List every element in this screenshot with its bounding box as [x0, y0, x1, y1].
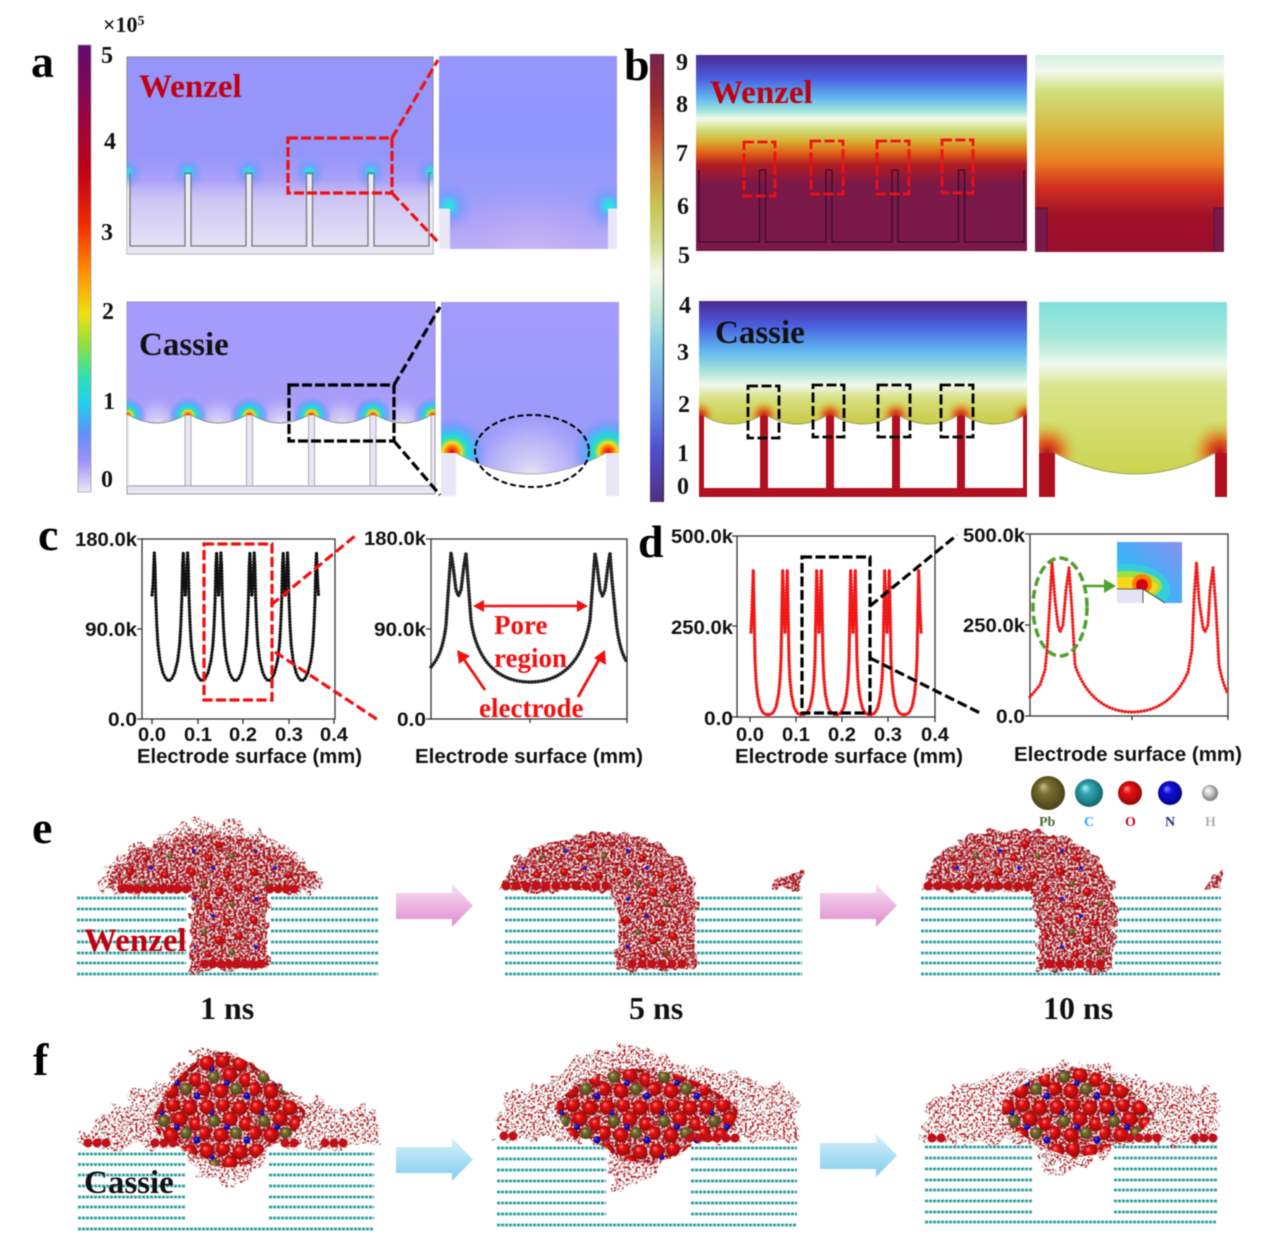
chart d left: 0.3 [874, 725, 902, 746]
chart c left: 0.0 [138, 725, 166, 746]
red zoom lines [271, 536, 378, 720]
colorbar b: 3 [677, 340, 689, 366]
chart c left: 0.1 [184, 725, 212, 746]
chart d left: 0.0 [736, 725, 764, 746]
Wenzel enlarged concentration [1035, 55, 1224, 252]
chart c left: 90.0k [85, 620, 137, 641]
snapshot 1 ns [77, 822, 378, 974]
black dashed boxes [748, 385, 973, 438]
N atom: N [1165, 815, 1175, 830]
Cassie heading: Cassie [84, 1165, 174, 1201]
panel c: electric field line charts [75, 529, 643, 768]
blue arrow 2 [820, 1134, 897, 1177]
colorbar a: 2 [102, 299, 114, 325]
C atom [1075, 779, 1103, 830]
panel label f: f [33, 1034, 49, 1085]
chart d right: Electrode surface (mm) [1014, 744, 1242, 766]
red zoom lines [392, 60, 438, 242]
red dashed selection box [204, 544, 272, 700]
Wenzel heading: Wenzel [710, 75, 813, 111]
O atom: O [1125, 815, 1136, 830]
pore region annotation: Pore [494, 610, 547, 640]
chart d right: 0.0 [996, 707, 1025, 728]
chart d left: 500.0k [671, 527, 733, 548]
H atom: H [1205, 815, 1216, 830]
atom legend [1031, 776, 1218, 830]
chart d left [671, 527, 963, 768]
chart d left: 0.2 [828, 725, 856, 746]
colorbar a: 3 [101, 220, 113, 246]
blue arrow 1 [396, 1138, 473, 1181]
chart c left: 0.2 [229, 725, 257, 746]
panel label d: d [638, 516, 664, 567]
chart c right: 180.0k [364, 529, 426, 550]
panel d: electric field line charts [671, 526, 1242, 768]
colorbar b: 5 [678, 243, 690, 269]
N atom [1158, 781, 1182, 830]
snapshot 10 ns [921, 830, 1222, 974]
panel f: Cassie molecular dynamics [78, 1045, 1218, 1229]
chart c left: 180.0k [75, 530, 137, 551]
time label 1 ns: 1 ns [200, 990, 254, 1026]
colorbar b: 1 [677, 441, 689, 467]
red dashed selection box [288, 138, 392, 193]
black zoom lines [870, 535, 982, 714]
Pb atom [1031, 776, 1065, 830]
black zoom lines [394, 307, 440, 495]
Pb atom: Pb [1039, 815, 1056, 830]
colorbar b: 8 [676, 92, 688, 118]
colorbar a [78, 12, 145, 493]
chart d right: 250.0k [963, 616, 1025, 637]
chart c right: 90.0k [374, 620, 426, 641]
red dashed boxes [744, 140, 973, 196]
panel b: concentration maps [650, 50, 1252, 502]
Cassie enlarged concentration [1038, 301, 1228, 498]
chart c left [75, 530, 362, 768]
Wenzel enlarged view [438, 55, 618, 250]
chart d right [963, 526, 1242, 766]
chart d left: 250.0k [671, 618, 733, 639]
electrode annotation [457, 650, 606, 723]
colorbar a: 0 [101, 467, 113, 493]
chart c left: 0.4 [320, 725, 348, 746]
Cassie enlarged view [440, 302, 620, 496]
colorbar b: 2 [678, 392, 690, 418]
Cassie concentration map [684, 301, 1042, 497]
chart d right: 500.0k [963, 526, 1025, 547]
pore region annotation: region [494, 643, 567, 673]
panel e: Wenzel molecular dynamics [77, 822, 1222, 1026]
colorbar a: 5 [138, 14, 145, 29]
Wenzel heading: Wenzel [139, 69, 242, 105]
panel label c: c [38, 509, 58, 560]
colorbar a: ×10 [103, 12, 138, 37]
colorbar b: 9 [676, 50, 688, 76]
green dashed ellipse [1033, 558, 1087, 656]
pore region annotation [473, 600, 588, 673]
chart c left: 0.0 [108, 710, 137, 731]
O atom [1118, 781, 1142, 830]
snapshot 5 ns [500, 832, 803, 974]
panel a: von Mises stress maps [77, 15, 620, 496]
colorbar a: 4 [104, 129, 116, 155]
chart c left: 0.3 [275, 725, 303, 746]
panel label e: e [32, 802, 52, 853]
black dashed selection box [802, 557, 870, 713]
colorbar a: 5 [101, 43, 113, 69]
chart c left: Electrode surface (mm) [137, 746, 362, 768]
inset field map [1116, 541, 1183, 604]
colorbar b: 7 [676, 141, 688, 167]
C atom: C [1084, 815, 1094, 830]
dashed meniscus ellipse [475, 415, 589, 487]
H atom [1202, 785, 1218, 830]
chart d left: 0.0 [704, 709, 733, 730]
panel label b: b [624, 39, 650, 90]
Wenzel concentration map [696, 55, 1027, 251]
chart c right [364, 529, 643, 768]
Wenzel stress map [110, 57, 448, 254]
colorbar b [650, 50, 691, 502]
pink arrow 2 [820, 884, 897, 927]
green arrow [1086, 579, 1116, 593]
chart d left: 0.4 [921, 725, 949, 746]
time label 10 ns: 10 ns [1043, 990, 1113, 1026]
colorbar b: 6 [677, 194, 689, 220]
snapshot 10 ns [925, 1065, 1218, 1222]
snapshot 5 ns [497, 1045, 798, 1225]
chart d left: Electrode surface (mm) [735, 746, 963, 768]
black dashed selection box [289, 385, 394, 441]
colorbar b: 4 [679, 293, 691, 319]
chart d left: 0.1 [782, 725, 810, 746]
time label 5 ns: 5 ns [629, 990, 683, 1026]
chart c right: 0.0 [397, 710, 426, 731]
Wenzel heading: Wenzel [84, 923, 187, 959]
colorbar a: 1 [103, 389, 115, 415]
pink arrow 1 [396, 884, 473, 927]
Cassie heading: Cassie [139, 327, 229, 363]
Cassie stress map [107, 302, 453, 494]
Cassie heading: Cassie [715, 315, 805, 351]
colorbar b: 0 [677, 474, 689, 500]
snapshot 1 ns [78, 1051, 375, 1229]
electrode annotation: electrode [479, 693, 583, 723]
chart c right: Electrode surface (mm) [415, 746, 643, 768]
panel label a: a [31, 36, 54, 87]
